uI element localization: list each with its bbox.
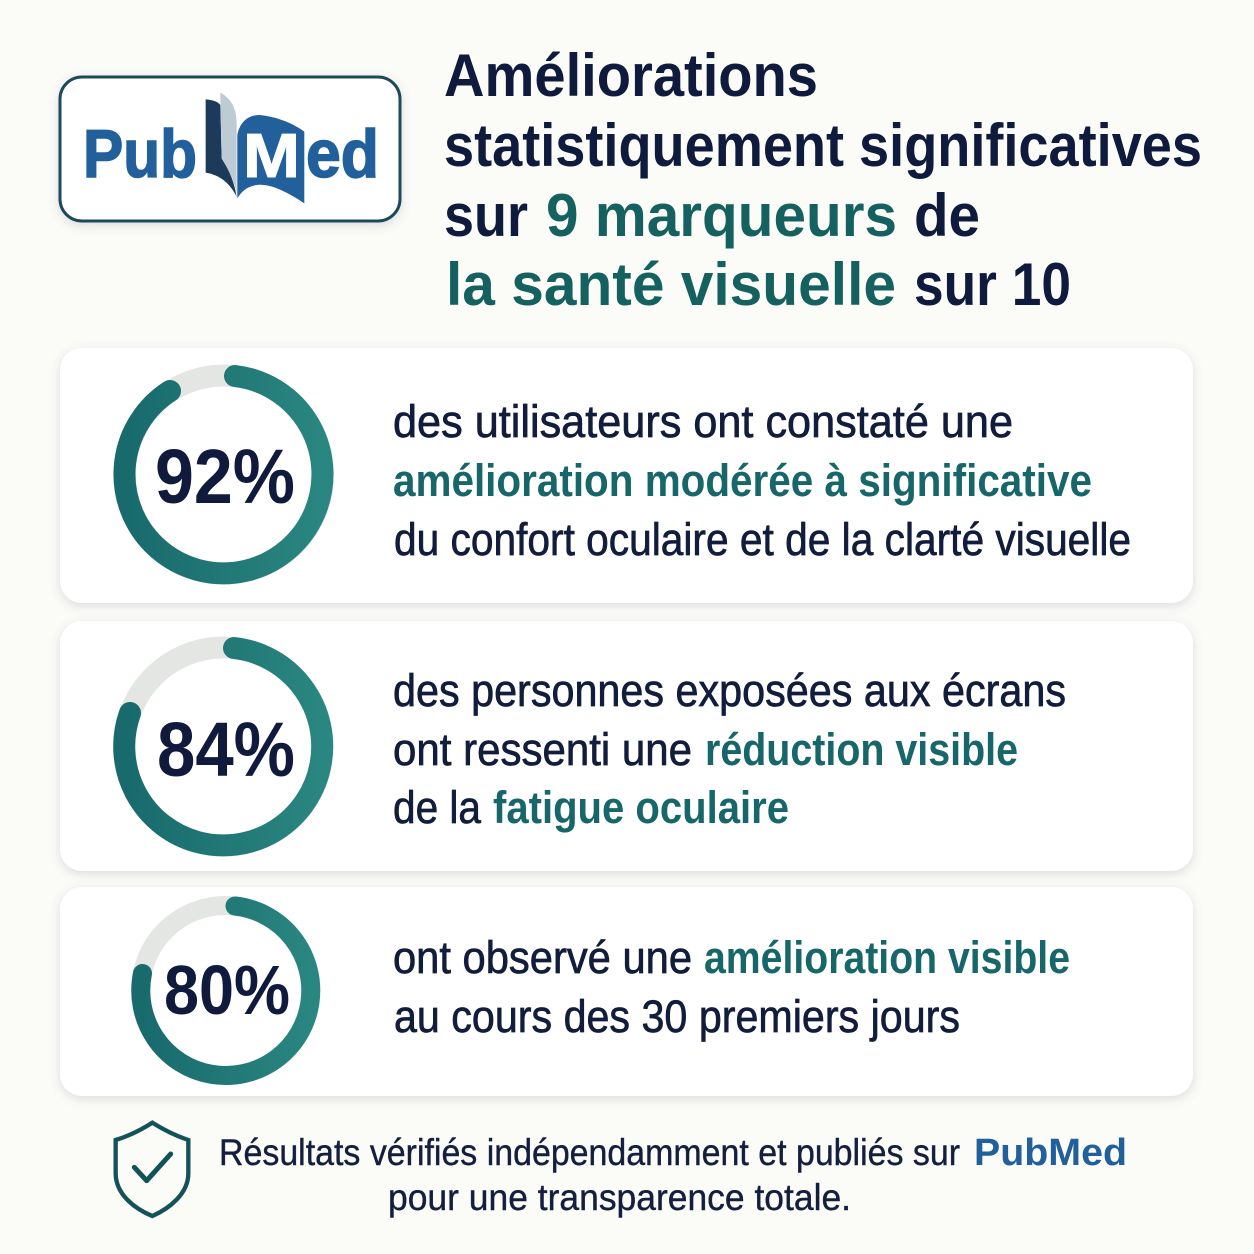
number: 84%: 84% <box>157 707 295 793</box>
number: 80%: 80% <box>164 951 290 1029</box>
icon: shield check <box>116 1123 188 1216</box>
title: sur <box>444 182 528 249</box>
logo text: Pub: Pub <box>83 116 197 192</box>
footer text <box>219 1132 1127 1218</box>
footer text: Résultats vérifiés indépendamment et publiés sur <box>219 1132 960 1173</box>
chart: 84% ring <box>124 648 322 846</box>
logo text: M: M <box>243 122 300 191</box>
logo text: ed: ed <box>306 116 379 192</box>
title: sur 10 <box>914 251 1071 318</box>
text: 80% description: au cours des 30 premiers jours <box>394 991 960 1042</box>
panel: 80% <box>60 887 1193 1096</box>
panel: 92% <box>60 348 1193 603</box>
text: 92% description: des utilisateurs ont constaté une <box>393 396 1013 447</box>
text: 92% description: du confort oculaire et de la clarté visuelle <box>394 514 1131 565</box>
icon: open book <box>206 92 304 203</box>
number: 92%: 92% <box>155 434 295 520</box>
text: 80% description: ont observé une <box>393 932 692 983</box>
footer text: pour une transparence totale. <box>388 1177 851 1218</box>
chart: 92% ring <box>124 376 323 574</box>
text: 92% description: amélioration modérée à significative <box>393 455 1092 506</box>
title: 9 marqueurs <box>546 182 897 249</box>
chart: 80% ring <box>140 906 311 1076</box>
text: 84% description <box>393 665 1066 833</box>
footer text: PubMed <box>974 1132 1127 1174</box>
text: 84% description: fatigue oculaire <box>493 782 789 833</box>
text: 84% description: ont ressenti une <box>393 724 692 775</box>
panel: 84% <box>60 621 1193 871</box>
text: 92% description <box>393 396 1131 565</box>
title: Améliorations <box>444 42 818 109</box>
text: 80% description: amélioration visible <box>704 932 1070 983</box>
text: 84% description: de la <box>393 782 482 833</box>
text: 80% description <box>393 932 1070 1042</box>
text: 84% description: des personnes exposées aux écrans <box>393 665 1066 716</box>
text: 84% description: réduction visible <box>705 724 1018 775</box>
logo: PubMed <box>60 77 400 221</box>
title: de <box>914 182 980 249</box>
title: la santé visuelle <box>446 251 896 318</box>
title <box>444 42 1202 318</box>
